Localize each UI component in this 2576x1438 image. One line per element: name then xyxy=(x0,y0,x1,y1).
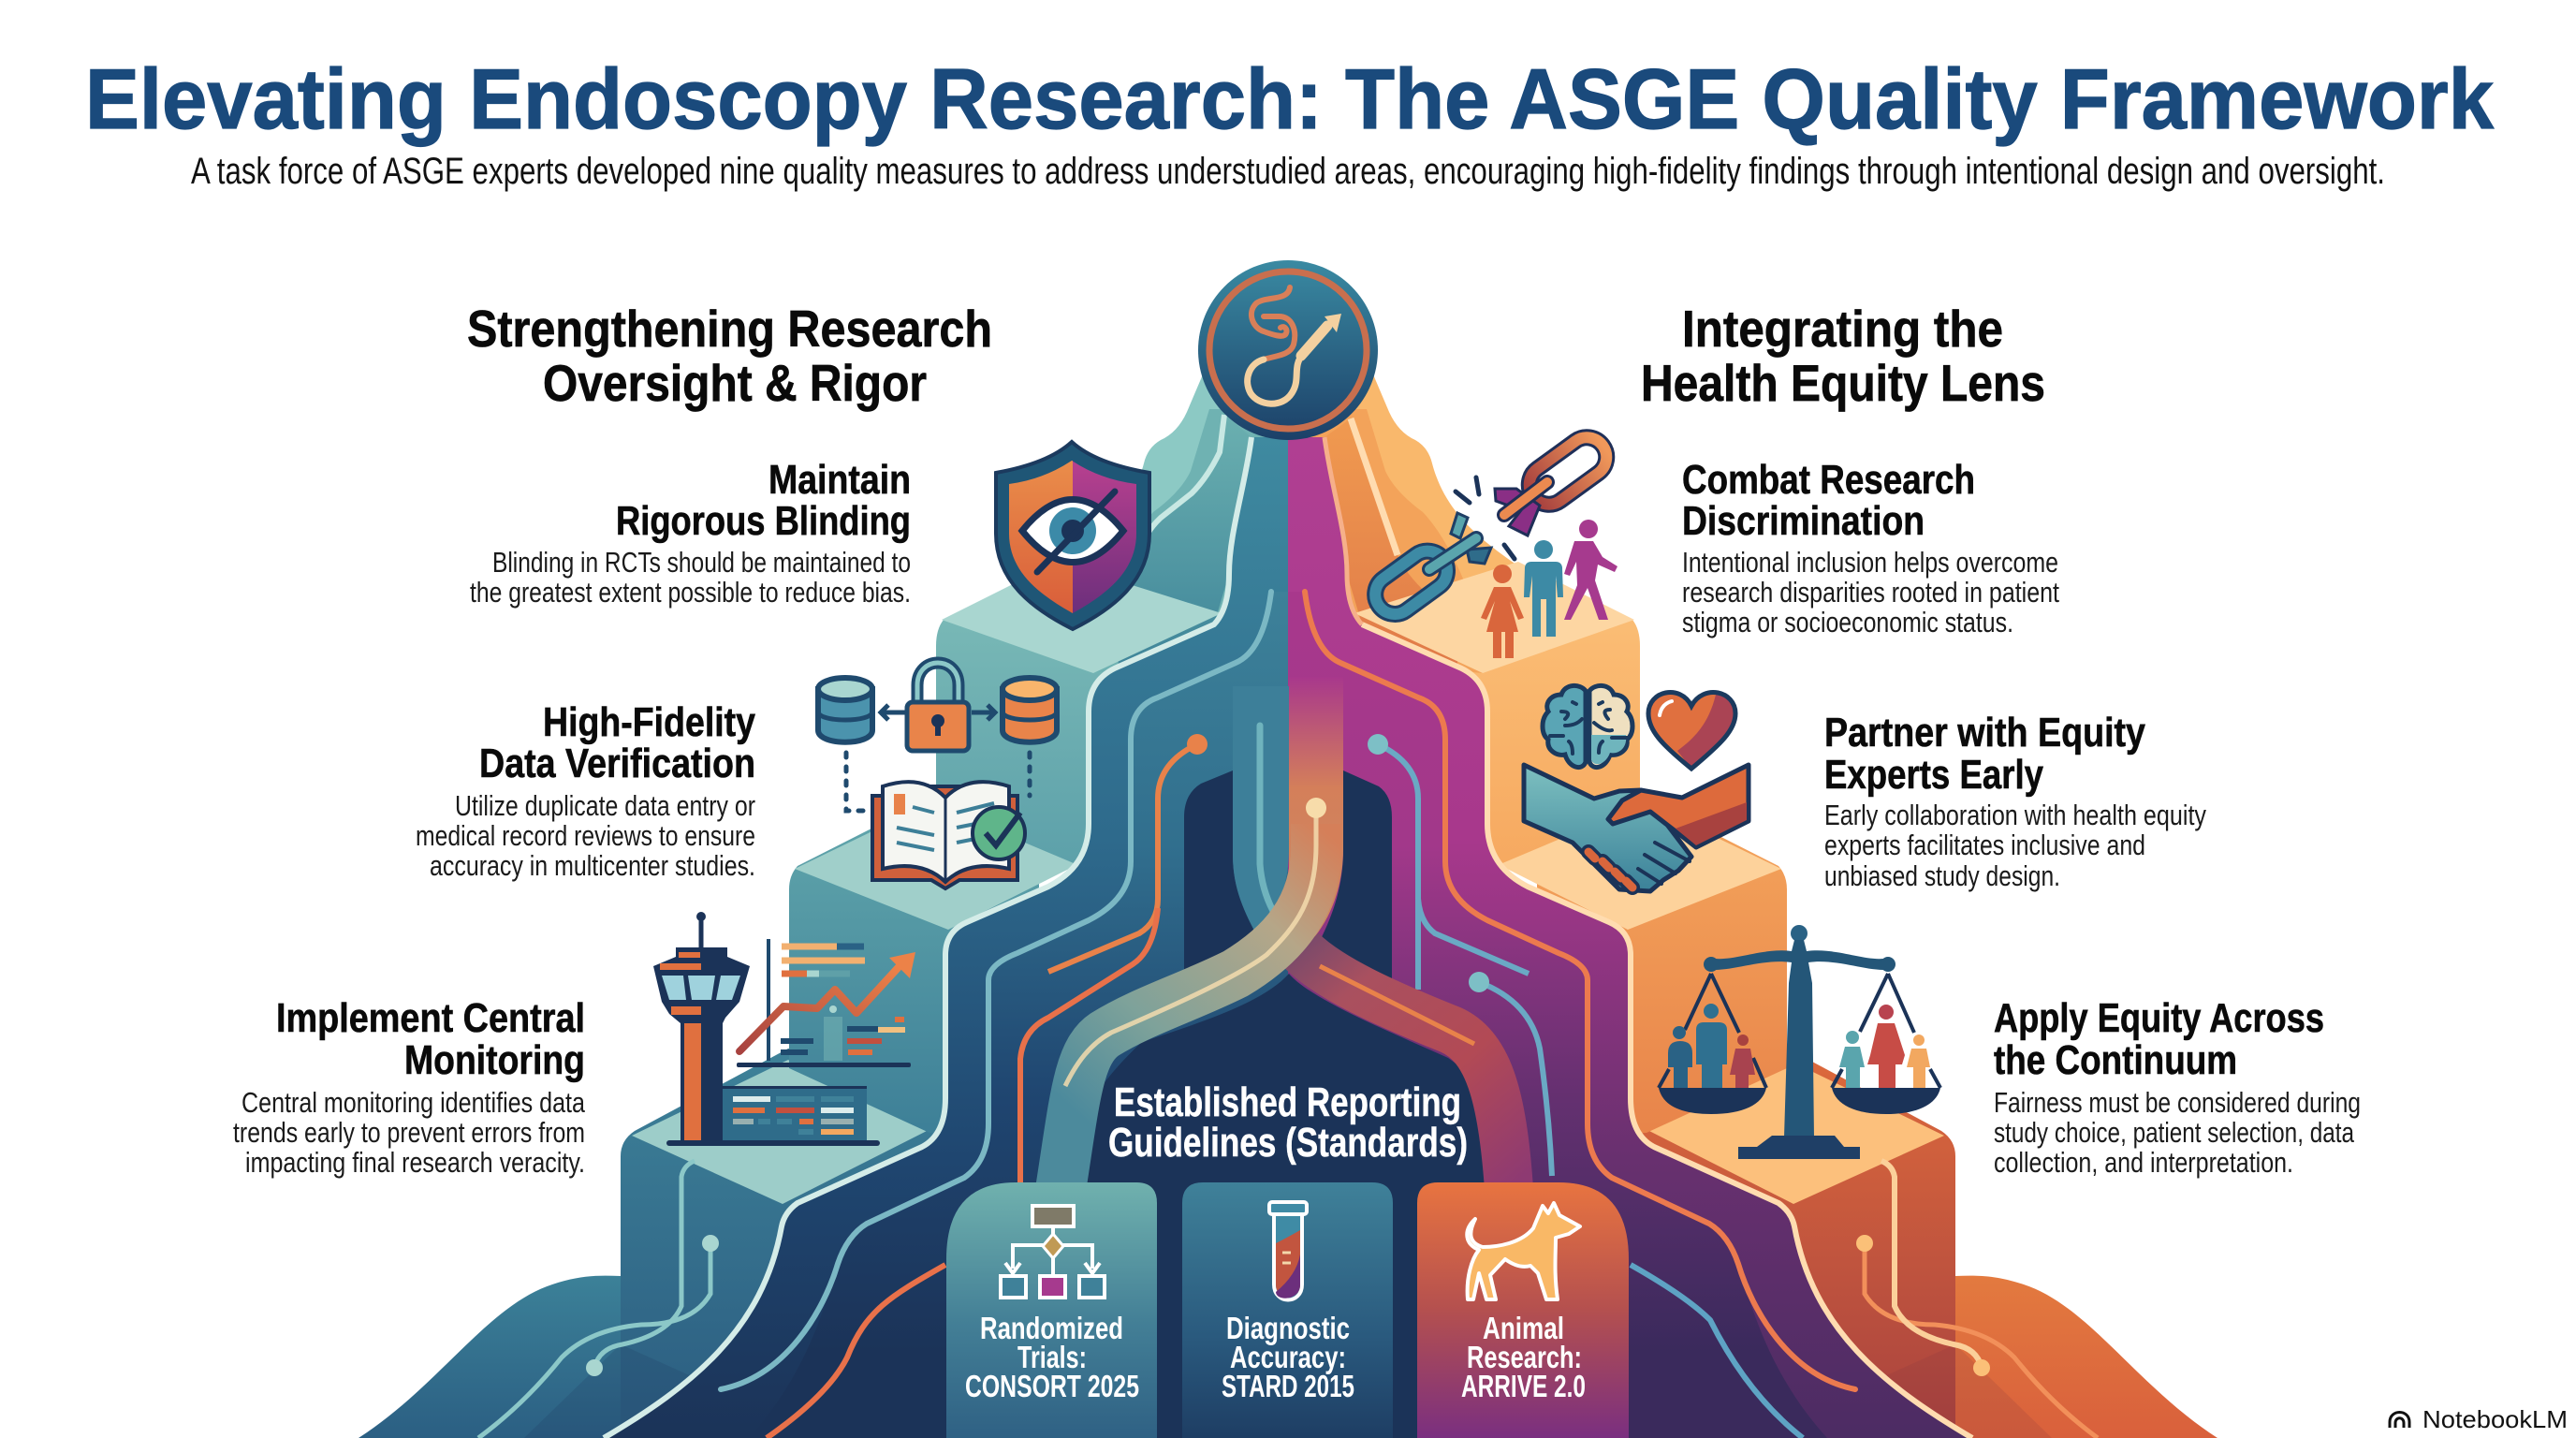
heading: health equity lens: Integrating the xyxy=(1682,300,2003,358)
notebooklm watermark: NotebookLM xyxy=(2422,1405,2568,1433)
heading: established reporting guidelines: Established Reporting xyxy=(1114,1079,1461,1125)
text: high-fidelity data verification: Utilize duplicate data entry or xyxy=(455,789,755,822)
text: apply equity across the continuum: Fairness must be considered during xyxy=(1994,1086,2361,1119)
title: Elevating Endoscopy Research: The ASGE Quality Framework xyxy=(85,52,2494,147)
label: randomized trials consort: Trials: xyxy=(1017,1340,1087,1374)
heading: strengthening research oversight: Oversight & Rigor xyxy=(543,354,927,412)
panel: diagnostic accuracy xyxy=(1182,1182,1393,1438)
icon: flowchart xyxy=(1001,1206,1105,1298)
left mountain: oversight steps xyxy=(359,374,1288,1438)
text: high-fidelity data verification: accuracy in multicenter studies. xyxy=(430,849,755,882)
right mountain: equity steps xyxy=(1288,374,2217,1438)
left data stream xyxy=(478,415,1288,1438)
label: diagnostic accuracy stard: Accuracy: xyxy=(1230,1340,1346,1374)
text: maintain rigorous blinding xyxy=(470,457,911,609)
icon: handshake xyxy=(1524,765,1749,891)
text: implement central monitoring: Monitoring xyxy=(404,1037,585,1083)
icon: test tube xyxy=(1269,1202,1307,1299)
text: partner with equity experts early: Experts Early xyxy=(1824,752,2043,798)
heading: strengthening research oversight: Strengthening Research xyxy=(467,300,992,358)
label: diagnostic accuracy stard: STARD 2015 xyxy=(1222,1369,1354,1403)
text: maintain rigorous blinding: Rigorous Blinding xyxy=(616,498,911,544)
text: combat research discrimination: stigma or socioeconomic status. xyxy=(1682,606,2013,638)
text: maintain rigorous blinding: the greatest extent possible to reduce bias. xyxy=(470,576,911,609)
text: combat research discrimination: Combat Research xyxy=(1682,457,1975,503)
heading: health equity lens: Health Equity Lens xyxy=(1641,354,2045,412)
heading: strengthening research oversight xyxy=(467,300,992,412)
label: animal research arrive xyxy=(1461,1311,1586,1403)
label: animal research arrive: Animal xyxy=(1483,1311,1564,1345)
text: combat research discrimination: Discrimination xyxy=(1682,498,1925,544)
label: animal research arrive: Research: xyxy=(1467,1340,1582,1374)
text: combat research discrimination: research disparities rooted in patient xyxy=(1682,576,2059,609)
icon: brain and heart xyxy=(1543,685,1735,769)
text: partner with equity experts early: Early collaboration with health equity xyxy=(1824,799,2206,831)
label: randomized trials consort: CONSORT 2025 xyxy=(965,1369,1139,1403)
text: maintain rigorous blinding: Maintain xyxy=(768,457,911,503)
text: apply equity across the continuum: collection, and interpretation. xyxy=(1994,1146,2293,1179)
text: high-fidelity data verification: High-Fidelity xyxy=(543,699,755,745)
icon: dog xyxy=(1467,1203,1580,1299)
text: high-fidelity data verification xyxy=(416,699,755,882)
text: implement central monitoring: impacting final research veracity. xyxy=(245,1146,585,1179)
text: implement central monitoring: Central monitoring identifies data xyxy=(242,1086,586,1119)
text: apply equity across the continuum: Apply Equity Across xyxy=(1994,995,2324,1041)
text: apply equity across the continuum: study choice, patient selection, data xyxy=(1994,1116,2355,1149)
label: diagnostic accuracy stard xyxy=(1222,1311,1354,1403)
text: partner with equity experts early: unbiased study design. xyxy=(1824,859,2060,892)
text: apply equity across the continuum: the Continuum xyxy=(1994,1037,2237,1083)
stepped mountain illustration xyxy=(359,374,2217,1438)
text: combat research discrimination xyxy=(1682,457,2059,638)
right data stream xyxy=(1288,418,2098,1438)
heading: established reporting guidelines: Guidelines (Standards) xyxy=(1108,1120,1468,1166)
text: partner with equity experts early: Partner with Equity xyxy=(1824,710,2145,756)
text: combat research discrimination: Intentional inclusion helps overcome xyxy=(1682,546,2058,579)
text: partner with equity experts early: experts facilitates inclusive and xyxy=(1824,829,2145,861)
text: implement central monitoring xyxy=(233,995,586,1179)
text: high-fidelity data verification: medical record reviews to ensure xyxy=(416,819,755,852)
panel: randomized trials xyxy=(946,1182,1157,1438)
text: apply equity across the continuum xyxy=(1994,995,2361,1179)
label: randomized trials consort: Randomized xyxy=(980,1311,1123,1345)
icon: balance scale with people xyxy=(1659,925,1940,1159)
text: high-fidelity data verification: Data Verification xyxy=(479,741,755,786)
text: implement central monitoring: Implement Central xyxy=(276,995,585,1041)
label: randomized trials consort xyxy=(965,1311,1139,1403)
icon: broken chain and people xyxy=(1368,430,1617,658)
icon: blinded eye shield xyxy=(996,442,1149,629)
label: animal research arrive: ARRIVE 2.0 xyxy=(1461,1369,1586,1403)
text: partner with equity experts early xyxy=(1824,710,2206,892)
central arch and crossing ribbons xyxy=(1048,677,1526,1438)
icon: endoscope medallion xyxy=(1198,260,1378,440)
heading: established reporting guidelines xyxy=(1108,1079,1468,1166)
text: maintain rigorous blinding: Blinding in RCTs should be maintained to xyxy=(492,546,911,579)
panel: animal research xyxy=(1417,1182,1629,1438)
icon: monitoring tower and dashboard xyxy=(653,912,915,1146)
text: implement central monitoring: trends early to prevent errors from xyxy=(233,1116,585,1149)
heading: health equity lens xyxy=(1641,300,2045,412)
icon: data verification xyxy=(818,663,1057,888)
label: diagnostic accuracy stard: Diagnostic xyxy=(1226,1311,1350,1345)
